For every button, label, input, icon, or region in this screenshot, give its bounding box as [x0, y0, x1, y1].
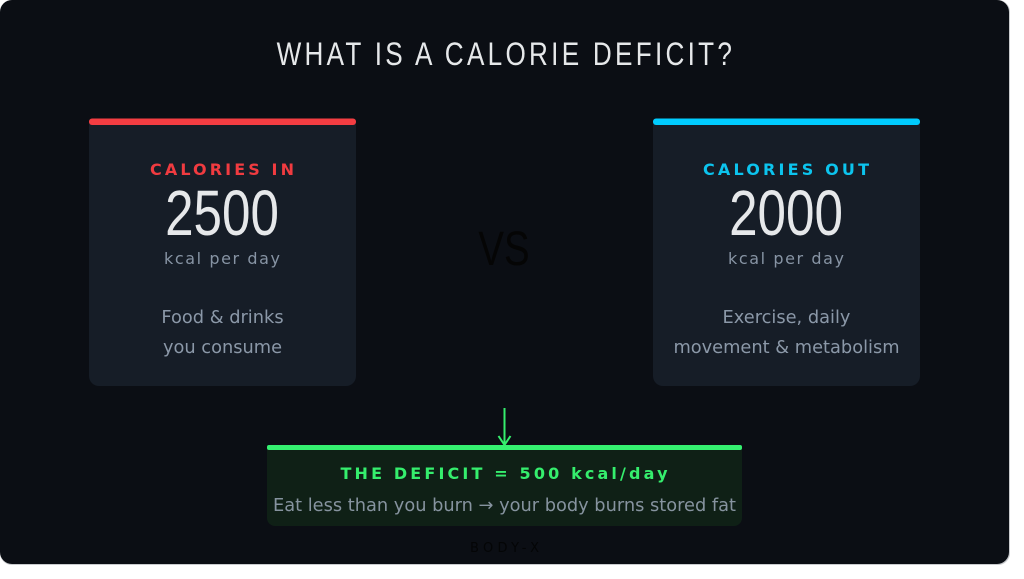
- panel: calories in: [89, 118, 356, 386]
- brand label: BODY-X: [470, 541, 539, 556]
- green top bar: [267, 445, 742, 450]
- panel: calories out: [653, 118, 920, 386]
- description: you consume: [163, 337, 282, 358]
- description: Food & drinks: [161, 307, 284, 328]
- arrow: [498, 408, 510, 445]
- description: movement & metabolism: [673, 337, 900, 358]
- number: 2500: 2500: [165, 179, 279, 249]
- title: WHAT IS A CALORIE DEFICIT?: [277, 38, 735, 73]
- card background: [89, 122, 356, 386]
- vs label: VS: [478, 223, 530, 276]
- blue top bar: [653, 118, 920, 125]
- unit: kcal per day: [728, 249, 844, 268]
- deficit background: [267, 447, 742, 526]
- number: 2000: 2000: [729, 179, 843, 249]
- red top bar: [89, 118, 356, 125]
- deficit heading: THE DEFICIT = 500 kcal/day: [340, 464, 668, 483]
- deficit description: Eat less than you burn → your body burns stored fat: [273, 495, 736, 516]
- description: [673, 307, 900, 358]
- heading: calories out: CALORIES OUT: [703, 160, 869, 179]
- unit: kcal per day: [164, 249, 280, 268]
- card background: [653, 122, 920, 386]
- description: [161, 307, 284, 358]
- heading: calories in: CALORIES IN: [150, 160, 294, 179]
- panel: deficit: [267, 408, 742, 526]
- description: Exercise, daily: [723, 307, 850, 328]
